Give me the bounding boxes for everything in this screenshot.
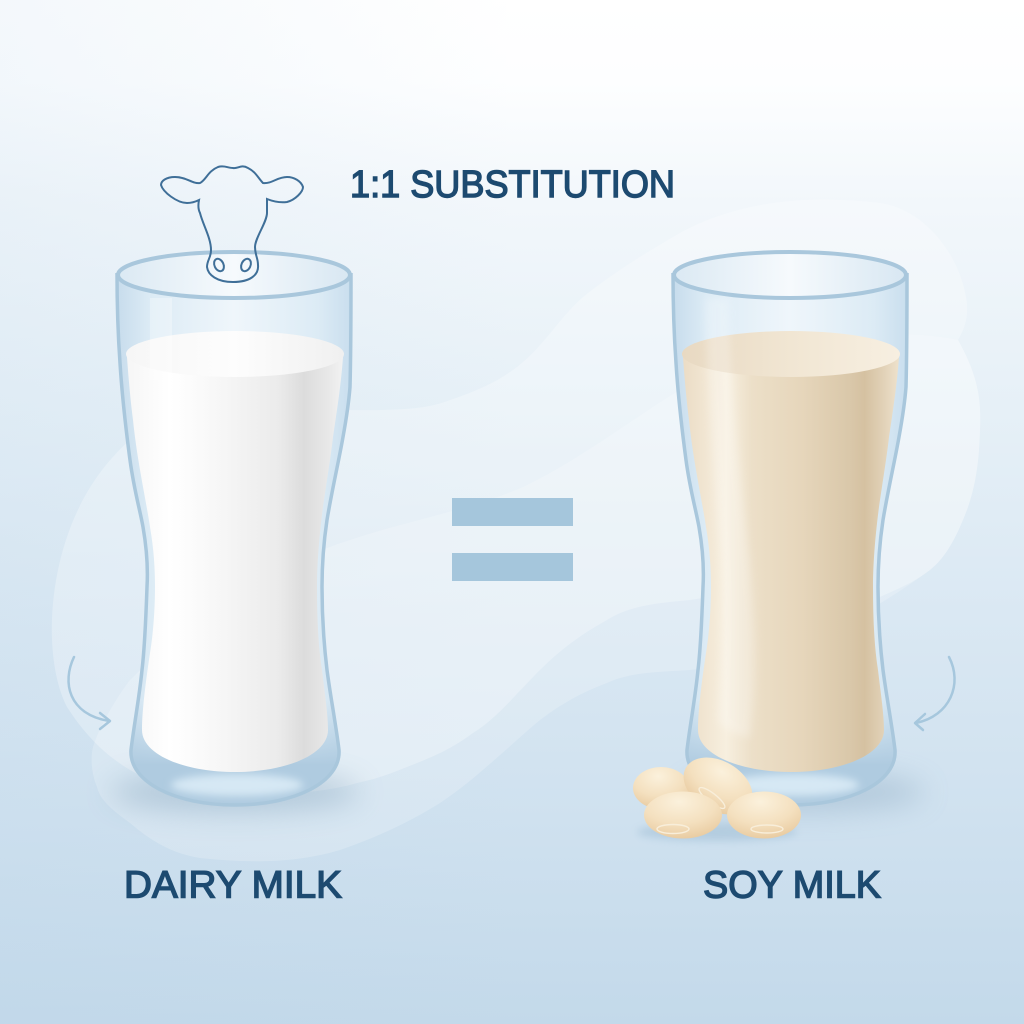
glass outline: [673, 273, 907, 805]
glass body: [117, 273, 351, 805]
glass base: [131, 700, 339, 805]
bean: back left: [633, 767, 689, 809]
glass rim: [674, 252, 906, 298]
soy milk surface: [682, 331, 900, 377]
milk surface: [126, 331, 344, 377]
arrow: right: [915, 657, 955, 730]
glass base: [687, 700, 895, 805]
glass highlight: [150, 298, 172, 380]
arrow: left: [69, 657, 110, 729]
panel: soy milk glass: [673, 252, 925, 812]
panel: dairy milk glass: [110, 252, 360, 812]
glass shadow: [110, 772, 360, 812]
label: soy milk: SOY MILK: [703, 864, 881, 906]
icon: cow head outline: [161, 166, 303, 282]
glass rim: [118, 252, 350, 298]
glass outline: [117, 273, 351, 805]
label: dairy milk: DAIRY MILK: [124, 864, 342, 906]
icon: nostrils: [212, 257, 253, 273]
title: 1:1 SUBSTITUTION: [350, 164, 675, 206]
glass shadow: [685, 772, 925, 812]
bean: top: [673, 746, 763, 826]
icon: equals sign: [452, 498, 573, 581]
background swoosh shapes: [52, 200, 980, 861]
glass body: [673, 273, 907, 805]
glass highlight: [706, 298, 755, 738]
soy milk: [683, 357, 899, 772]
icon: soybeans: [633, 746, 801, 841]
milk: [127, 357, 343, 772]
bean: front right: [727, 792, 801, 838]
bean: front left: [644, 792, 722, 838]
